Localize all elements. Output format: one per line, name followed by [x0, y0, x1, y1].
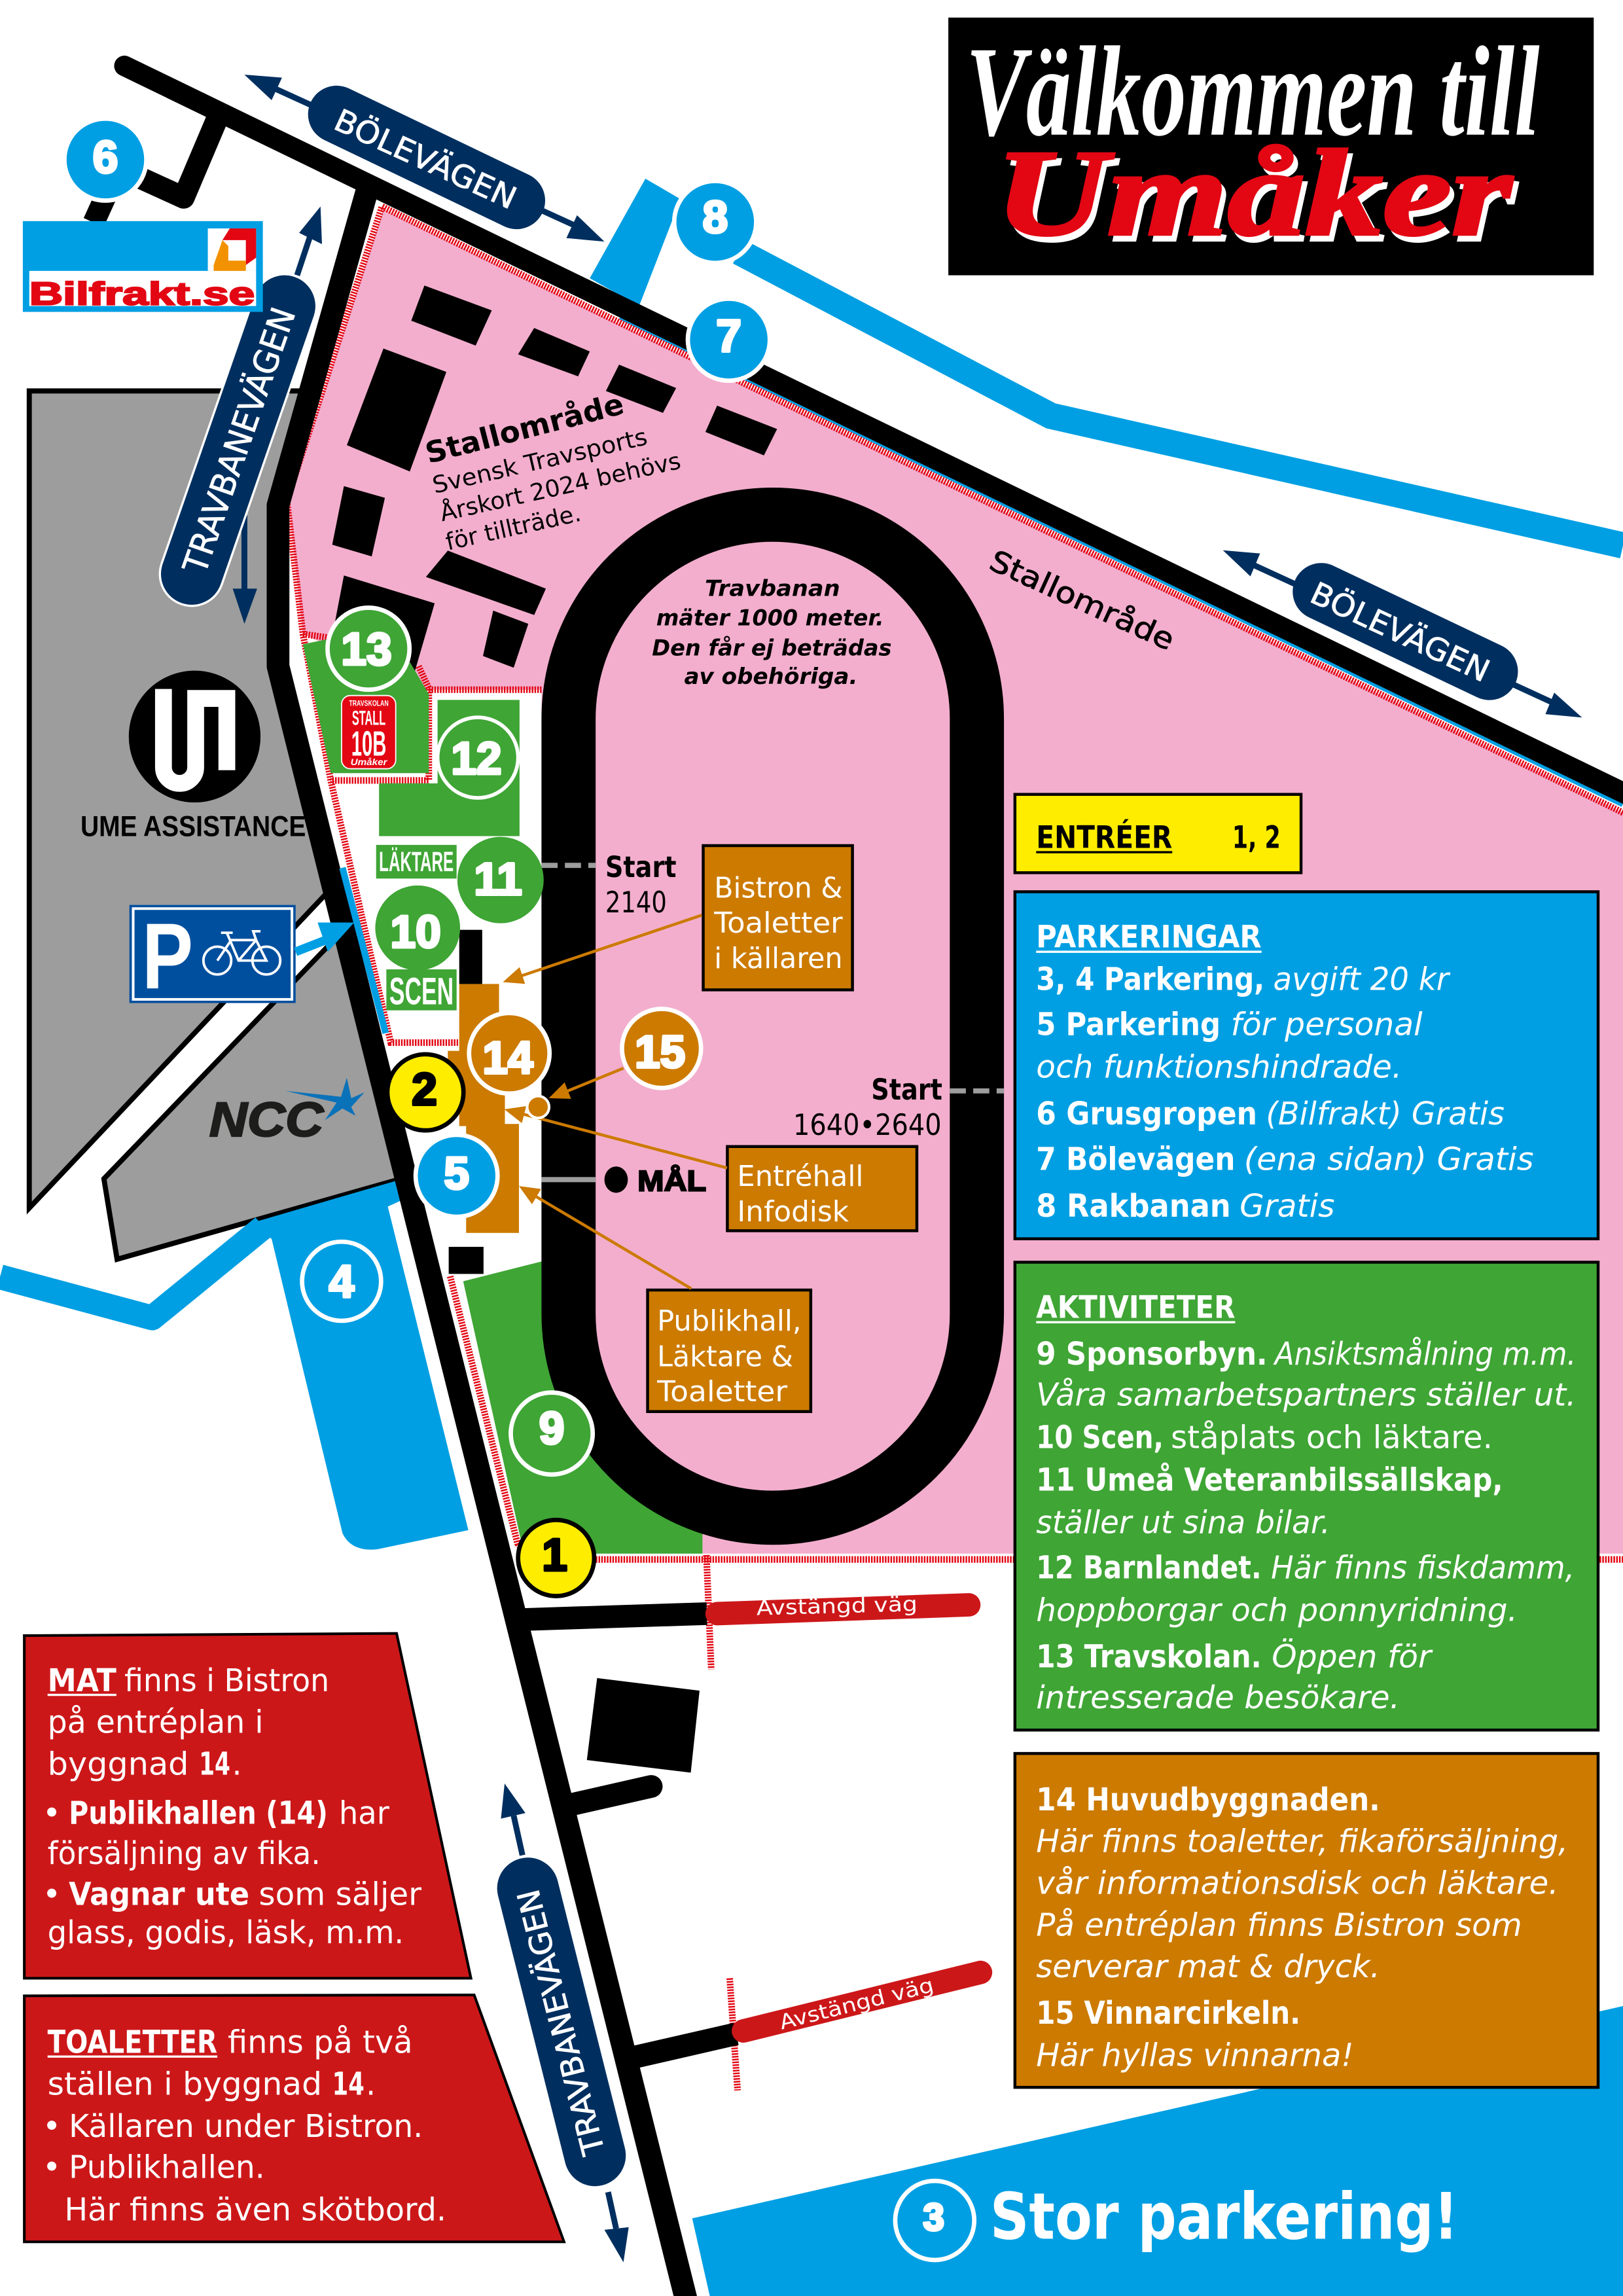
finish line MÅL: MÅL	[637, 1166, 706, 1198]
start line 2140: 2140	[605, 885, 667, 920]
race track oval	[569, 514, 977, 1518]
panel: Mat: •	[43, 1876, 61, 1913]
panel: Parkeringar: och funktionshindrade.	[1036, 1049, 1402, 1086]
orange label: Bistron: Toaletter	[713, 907, 843, 940]
panel: Mat: försäljning av fika.	[48, 1835, 321, 1872]
panel: Toaletter: finns på två	[228, 2024, 413, 2061]
green area 12	[379, 700, 520, 836]
marker 3: 3	[923, 2196, 944, 2238]
panel: Parkeringar: avgift 20 kr	[1274, 961, 1451, 997]
black building above 14	[459, 930, 482, 984]
panel: Toaletter: Publikhallen.	[69, 2149, 265, 2185]
bike parking sign	[130, 904, 296, 1009]
pill: Travbanevägen south: TRAVBANEVÄGEN	[510, 1886, 613, 2159]
marker 12	[438, 717, 518, 798]
panel: Huvudbyggnaden: Här hyllas vinnarna!	[1036, 2037, 1354, 2074]
marker 3	[895, 2181, 974, 2260]
title line: Umåker: Umåker	[995, 125, 1513, 261]
panel: Parkeringar: 6 Grusgropen	[1036, 1096, 1257, 1132]
Bilfrakt sign	[23, 221, 263, 312]
pink area: stall and infield	[289, 209, 1623, 1554]
panel: Aktiviteter: 9 Sponsorbyn.	[1036, 1336, 1268, 1372]
black buildings in stable area	[329, 285, 777, 673]
panel: Mat: som säljer	[259, 1876, 421, 1913]
NCC logo	[209, 1078, 365, 1147]
winners circle dot	[527, 1096, 549, 1118]
pill: Bölevägen east	[1223, 550, 1582, 717]
marker 14: 14	[482, 1032, 533, 1083]
marker 1: 1	[542, 1530, 567, 1581]
panel: Aktiviteter	[1015, 1263, 1598, 1730]
marker 6	[64, 118, 147, 201]
marker 7: 7	[716, 310, 741, 361]
marker 14	[469, 1013, 550, 1094]
panel: Mat: glass, godis, läsk, m.m.	[48, 1914, 404, 1951]
NCC logo: NCC	[209, 1092, 325, 1147]
orange label: Entréhall: Infodisk	[737, 1196, 849, 1229]
marker 13	[327, 607, 410, 690]
panel: Huvudbyggnaden	[1015, 1753, 1598, 2087]
text: Stall access note: Svensk Travsports	[430, 423, 650, 499]
text: Stall access note	[430, 423, 683, 556]
label: SCEN: SCEN	[389, 971, 454, 1013]
bike parking sign: P	[142, 904, 193, 1009]
label: Stallområde east: Stallområde	[984, 543, 1180, 657]
panel: Aktiviteter: Ansiktsmålning m.m.	[1273, 1336, 1576, 1372]
label: Avstängd väg upper: Avstängd väg	[756, 1592, 918, 1621]
side road to black building	[574, 1786, 651, 1804]
orange label: Bistron: Bistron &	[714, 872, 843, 905]
panel: Mat: .	[232, 1746, 242, 1783]
marker 8	[674, 181, 756, 263]
orange label: Bistron: i källaren	[714, 942, 843, 975]
pill: Bölevägen east: BÖLEVÄGEN	[1305, 575, 1495, 690]
marker 9	[510, 1393, 593, 1475]
panel: Mat: •	[43, 1795, 61, 1832]
panel: Aktiviteter: intresserade besökare.	[1036, 1679, 1400, 1716]
panel: Entréer	[1015, 795, 1301, 872]
orange label: Publikhall: Läktare &	[657, 1340, 793, 1373]
panel: Toaletter: Här finns även skötbord.	[64, 2192, 446, 2229]
parking strip 7	[620, 316, 1623, 804]
start line 1640 2640	[793, 1072, 1004, 1142]
panel: Mat: har	[339, 1795, 389, 1832]
panel: Aktiviteter: ställer ut sina bilar.	[1036, 1504, 1330, 1541]
heading: Aktiviteter: AKTIVITETER	[1036, 1290, 1235, 1326]
arrow: Entréhall to building	[505, 1106, 727, 1168]
panel: Toaletter: .	[366, 2066, 376, 2103]
marker 2	[387, 1054, 463, 1130]
pill: Bölevägen north: BÖLEVÄGEN	[329, 102, 522, 217]
panel: Entréer: ENTRÉER	[1036, 819, 1172, 855]
label: Avstängd väg lower: Avstängd väg	[777, 1973, 936, 2035]
start line 1640 2640: 1640•2640	[793, 1107, 942, 1142]
panel: Huvudbyggnaden: På entréplan finns Bistron som	[1036, 1907, 1522, 1944]
text: Stall access note: Årskort 2024 behövs	[437, 446, 683, 527]
green area 13	[303, 638, 429, 773]
pill: Travbanevägen north: TRAVBANEVÄGEN	[175, 302, 304, 579]
black building south	[587, 1678, 700, 1772]
text: Stor parkering: Stor parkering!	[990, 2180, 1458, 2255]
title panel	[948, 18, 1594, 276]
orange label: Publikhall	[648, 1290, 811, 1412]
Stall 10B sign: Umåker	[351, 757, 387, 767]
panel: Mat: Publikhallen (14)	[69, 1795, 328, 1832]
panel: Aktiviteter: Öppen för	[1272, 1638, 1433, 1675]
side road to parking 6	[142, 120, 217, 198]
marker 13: 13	[341, 624, 392, 675]
pill: Bölevägen north	[244, 75, 605, 242]
Stall 10B sign	[342, 696, 396, 769]
Stall 10B sign: TRAVSKOLAN	[349, 698, 389, 708]
black building below 14	[449, 1247, 484, 1274]
label: LÄKTARE	[376, 845, 457, 878]
Stall 10B sign: 10B	[351, 724, 386, 763]
panel: Aktiviteter: hoppborgar och ponnyridning.	[1036, 1592, 1518, 1629]
marker 2: 2	[412, 1064, 437, 1115]
panel: Aktiviteter: Här finns fiskdamm,	[1271, 1550, 1575, 1587]
text: Travbanan note: mäter 1000 meter.	[656, 605, 884, 630]
panel: Aktiviteter: ståplats och läktare.	[1171, 1420, 1493, 1456]
start line 2140	[541, 850, 677, 920]
title line shadow: Umåker: Umåker	[999, 131, 1518, 267]
Travbanevägen road	[278, 185, 688, 2296]
red hatched fence lines	[287, 206, 1623, 2090]
marker 5: 5	[444, 1148, 469, 1199]
parking area 4	[247, 1180, 469, 1550]
pill: Travbanevägen north	[175, 206, 322, 624]
panel: Parkeringar	[1015, 891, 1598, 1239]
heading: Toaletter: TOALETTER	[48, 2024, 217, 2061]
panel: Toaletter: 14	[332, 2066, 365, 2103]
panel: Parkeringar: 5 Parkering	[1036, 1007, 1221, 1043]
marker 8: 8	[703, 192, 728, 243]
panel: Mat: på entréplan i	[48, 1704, 264, 1740]
panel: Aktiviteter: 10 Scen,	[1036, 1420, 1164, 1456]
bike parking arrow	[296, 922, 354, 952]
big parking 3 area	[692, 2006, 1623, 2296]
Bilfrakt sign: Bilfrakt.se	[29, 276, 255, 312]
start line 2140: Start	[605, 850, 677, 884]
marker 11	[457, 837, 544, 924]
Bölevägen road	[124, 66, 1623, 804]
orange label: Entréhall: Entréhall	[737, 1160, 863, 1193]
text: Travbanan note: Den får ej beträdas	[652, 635, 892, 660]
panel: Mat	[24, 1634, 471, 1979]
finish line MÅL	[541, 1166, 706, 1198]
Ume Assistance logo	[80, 671, 306, 842]
marker 4	[302, 1242, 381, 1321]
panel: Huvudbyggnaden: 15 Vinnarcirkeln.	[1036, 1995, 1300, 2032]
panel: Aktiviteter: Våra samarbetspartners ställer ut.	[1036, 1377, 1576, 1414]
pill: Travbanevägen south	[501, 1784, 629, 2263]
closed road south 1	[524, 1613, 707, 1619]
panel: Mat: byggnad	[48, 1746, 188, 1783]
panel: Mat: 14	[199, 1746, 230, 1783]
panel: Huvudbyggnaden: Här finns toaletter, fikaförsäljning,	[1036, 1823, 1568, 1859]
panel: Mat: finns i Bistron	[124, 1662, 329, 1699]
marker 10	[375, 886, 460, 971]
heading: Parkeringar: PARKERINGAR	[1036, 919, 1262, 956]
label: LÄKTARE: LÄKTARE	[379, 847, 454, 878]
label: Avstängd väg upper	[717, 1592, 969, 1621]
text: Travbanan note: Travbanan	[705, 576, 840, 601]
parking lane 8 road	[739, 252, 1623, 545]
green area 9	[463, 1261, 702, 1554]
panel: Parkeringar: (Bilfrakt) Gratis	[1266, 1096, 1505, 1132]
panel: Mat: Vagnar ute	[69, 1876, 249, 1913]
parking area 8	[590, 179, 681, 306]
panel: Parkeringar: 7 Bölevägen	[1036, 1141, 1235, 1178]
heading: Mat: MAT	[48, 1662, 116, 1699]
panel: Entréer: 1, 2	[1232, 819, 1281, 855]
marker 7	[688, 298, 770, 381]
panel: Parkeringar: Gratis	[1240, 1188, 1334, 1225]
start line 1640 2640: Start	[871, 1072, 942, 1107]
arrow: Publikhall to building	[519, 1186, 691, 1289]
text: Travbanan note: av obehöriga.	[684, 664, 857, 689]
marker 6: 6	[93, 132, 118, 183]
panel: Parkeringar: (ena sidan) Gratis	[1244, 1141, 1534, 1178]
blue road to parking 4	[0, 1227, 264, 1318]
heading: Stallområde: Stallområde	[421, 386, 628, 471]
closed road south 2	[633, 2034, 736, 2057]
panel: Aktiviteter: 13 Travskolan.	[1036, 1638, 1262, 1675]
marker 10: 10	[391, 906, 441, 958]
arrow: 15 to winners circle	[549, 1068, 624, 1099]
panel: Parkeringar: för personal	[1231, 1007, 1423, 1043]
marker 9: 9	[539, 1403, 564, 1454]
marker 15	[622, 1009, 701, 1088]
text: Stall access note: för tillträde.	[443, 500, 583, 556]
arrow: Bistron to building	[503, 915, 702, 984]
panel: Aktiviteter: 11 Umeå Veteranbilssällskap,	[1036, 1462, 1503, 1499]
panel: Toaletter: ställen i byggnad	[48, 2066, 322, 2103]
panel: Toaletter: •	[43, 2108, 61, 2145]
panel: Toaletter: Källaren under Bistron.	[69, 2108, 423, 2145]
marker 5	[416, 1135, 497, 1217]
gray area: NCC	[104, 934, 401, 1259]
gray area: Ume Assistance	[29, 391, 330, 1208]
marker 4: 4	[329, 1256, 355, 1307]
label: SCEN	[386, 969, 457, 1013]
orange main building 14	[448, 984, 519, 1233]
Ume Assistance logo: UME ASSISTANCE	[80, 810, 306, 842]
panel: Huvudbyggnaden: vår informationsdisk och läktare.	[1036, 1865, 1559, 1902]
panel: Huvudbyggnaden: serverar mat & dryck.	[1036, 1948, 1380, 1985]
marker 15: 15	[635, 1026, 685, 1077]
label: Avstängd väg lower	[743, 1973, 980, 2035]
bike lane strip	[342, 868, 385, 1033]
marker 11: 11	[474, 853, 522, 905]
marker 12: 12	[451, 733, 501, 784]
stub from parking 6 to sign	[94, 190, 108, 223]
Stall 10B sign: STALL	[352, 706, 385, 729]
panel: Toaletter: •	[43, 2149, 61, 2185]
text: Travbanan note	[652, 576, 892, 689]
orange label: Bistron	[704, 846, 853, 990]
panel: Huvudbyggnaden: 14 Huvudbyggnaden.	[1036, 1782, 1380, 1818]
orange label: Publikhall: Toaletter	[656, 1376, 787, 1408]
panel: Parkeringar: 8 Rakbanan	[1036, 1188, 1231, 1225]
orange label: Entréhall	[727, 1147, 917, 1230]
panel: Aktiviteter: 12 Barnlandet.	[1036, 1550, 1262, 1587]
marker 1	[518, 1520, 594, 1596]
orange label: Publikhall: Publikhall,	[657, 1305, 802, 1338]
panel: Toaletter	[24, 1995, 564, 2242]
panel: Parkeringar: 3, 4 Parkering,	[1036, 961, 1264, 997]
